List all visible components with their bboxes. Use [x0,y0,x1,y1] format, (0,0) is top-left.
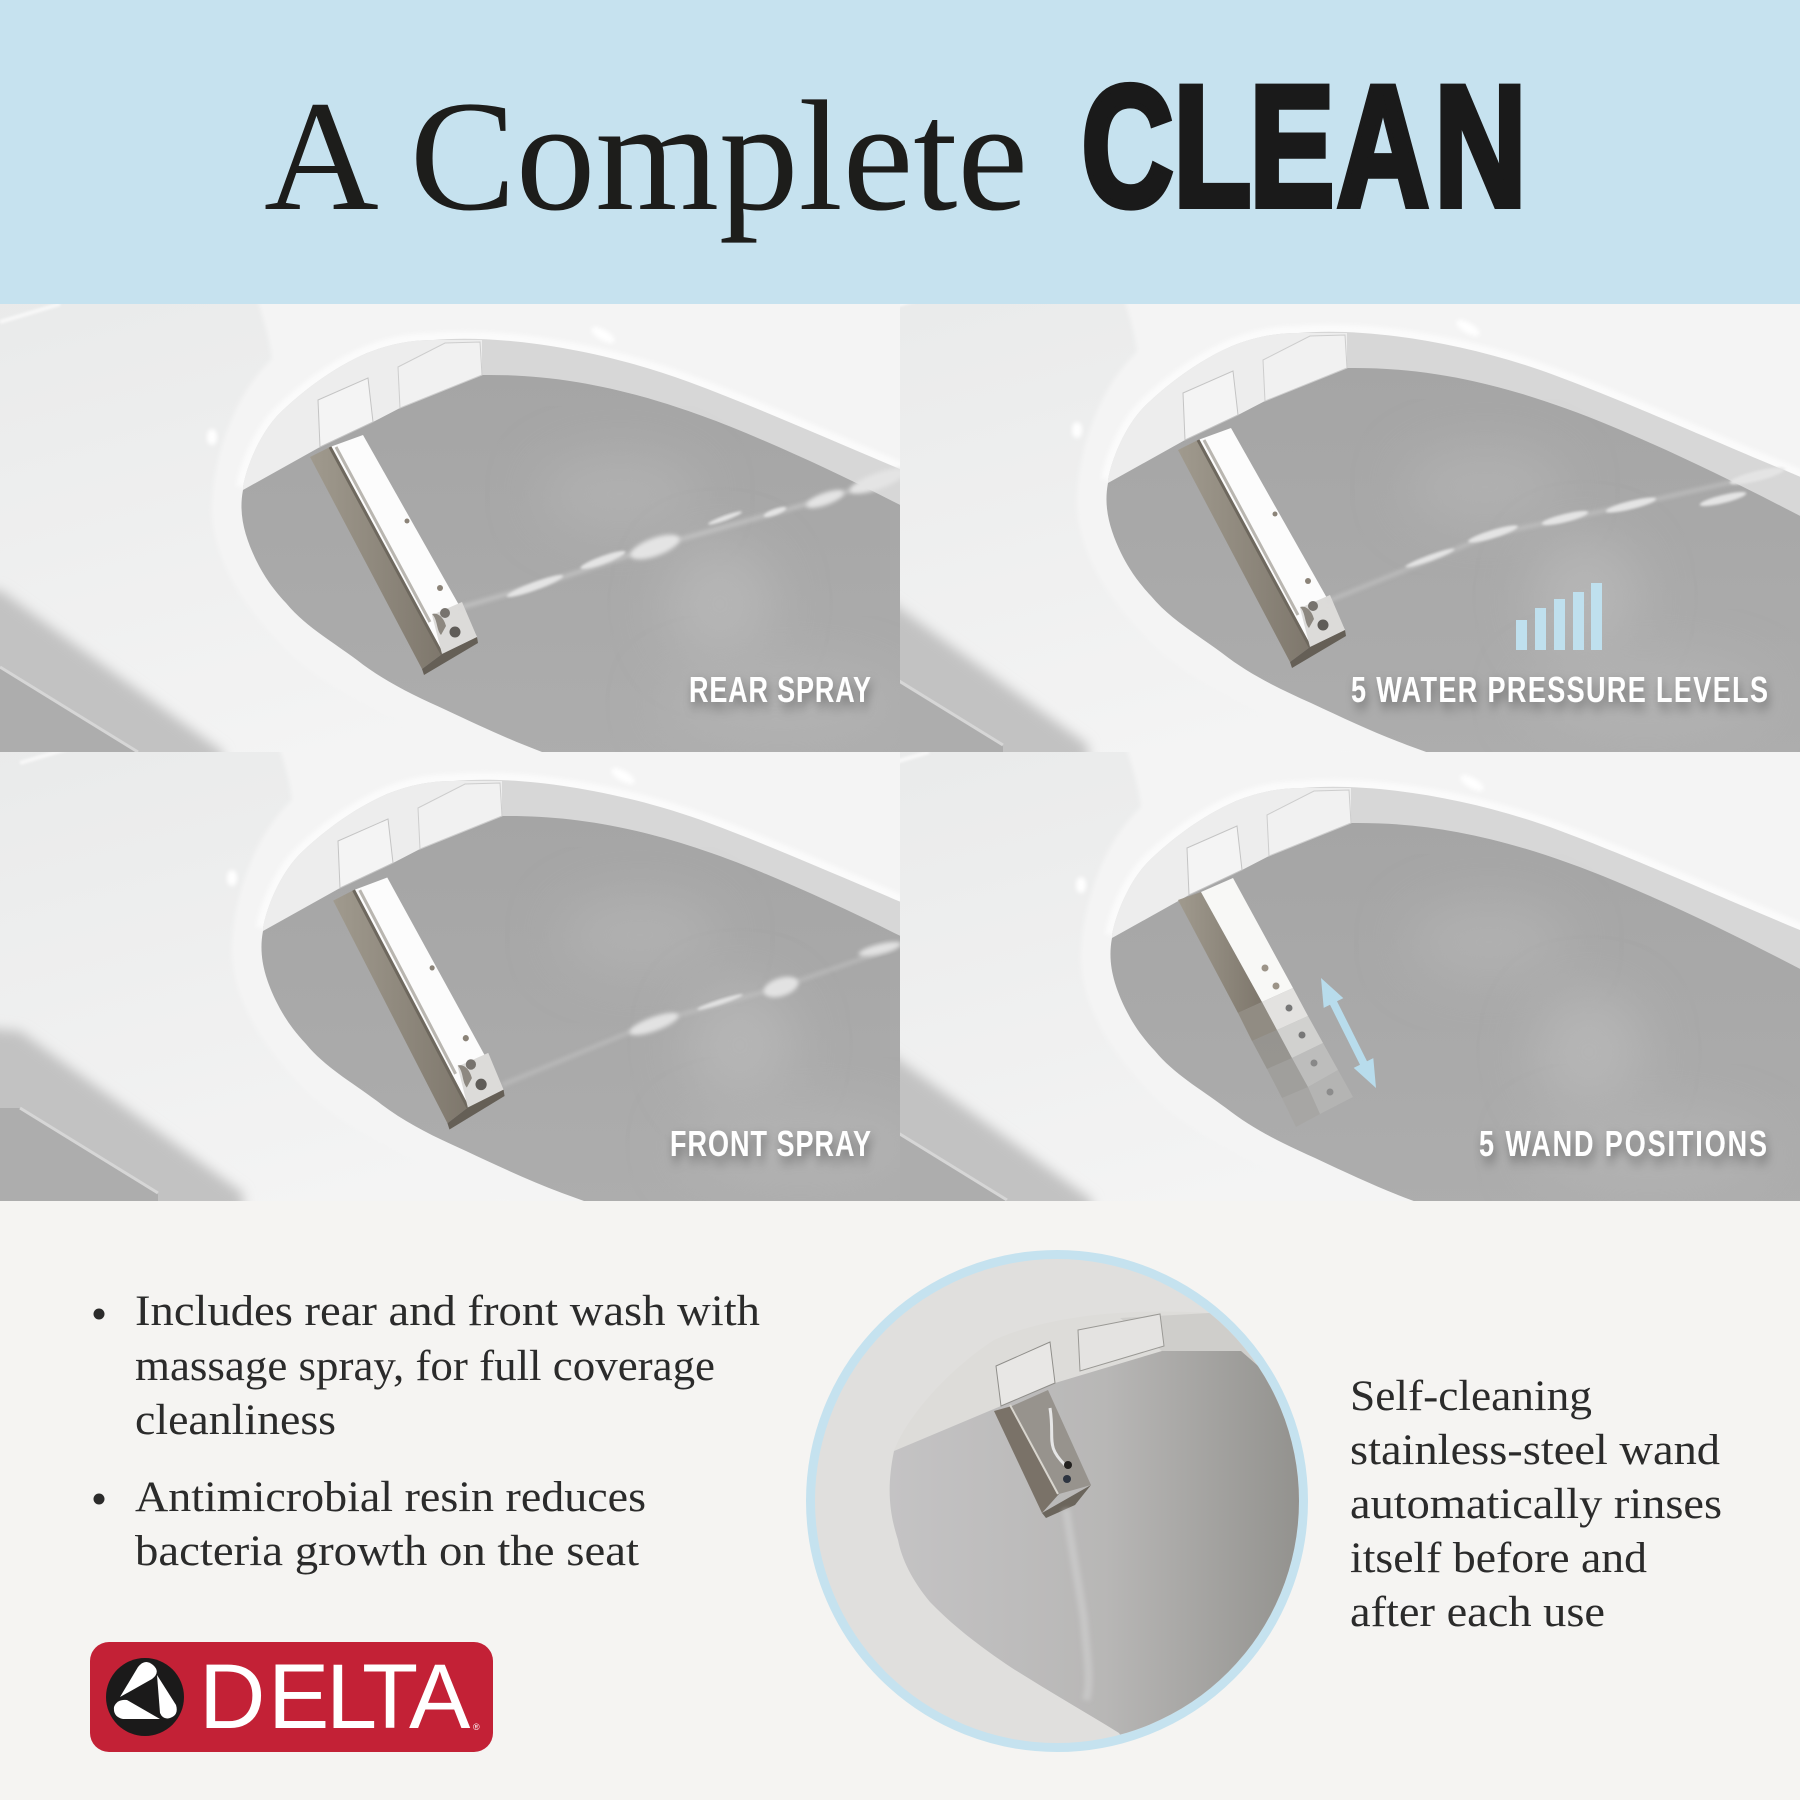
bullet two [94,1474,646,1575]
sprayer doors [996,1342,1055,1406]
label: REAR SPRAY [689,669,871,710]
wand: rear spray [310,435,478,675]
bullet list [94,1288,760,1575]
self-cleaning description: automatically rinses [1350,1481,1722,1528]
water spray [502,939,903,1085]
self-cleaning description: itself before and [1350,1535,1647,1582]
wand: pressure [1178,428,1346,668]
label: 5 WATER PRESSURE LEVELS [1351,669,1768,710]
arrow: wand travel [1321,978,1376,1088]
registered mark: ® [473,1722,480,1732]
bullet one [94,1288,760,1444]
label: 5 WAND POSITIONS [1479,1123,1767,1164]
water stream [1066,1509,1089,1700]
label: FRONT SPRAY [670,1123,871,1164]
bullet one: Includes rear and front wash with [135,1288,760,1335]
panel: rear spray [0,304,900,752]
water spray [459,463,909,608]
circular inset: self-cleaning wand [806,1250,1308,1752]
bullet two: Antimicrobial resin reduces [135,1474,646,1521]
panel: front spray [0,752,900,1201]
bullet two: bacteria growth on the seat [135,1528,639,1575]
icon: delta mark [106,1658,184,1736]
water spray [1326,464,1785,602]
title: A Complete [264,69,1028,244]
self-cleaning description: after each use [1350,1589,1605,1636]
retracted wand [994,1390,1091,1518]
wand with five ghosted positions [1178,878,1353,1127]
panel: water pressure levels [900,304,1800,752]
header band [0,0,1800,304]
title emphasis: CLEAN [1082,51,1526,243]
wordmark: DELTA [199,1646,471,1748]
self-cleaning description: stainless-steel wand [1350,1427,1720,1474]
bullet one: cleanliness [135,1397,336,1444]
panel: wand positions [900,752,1800,1201]
icon: pressure bars [1516,583,1602,650]
bullet one: massage spray, for full coverage [135,1343,715,1390]
self-cleaning description: Self-cleaning [1350,1373,1592,1420]
wand: front spray [333,878,505,1130]
logo: Delta [90,1642,493,1752]
self-cleaning description [1350,1373,1722,1636]
